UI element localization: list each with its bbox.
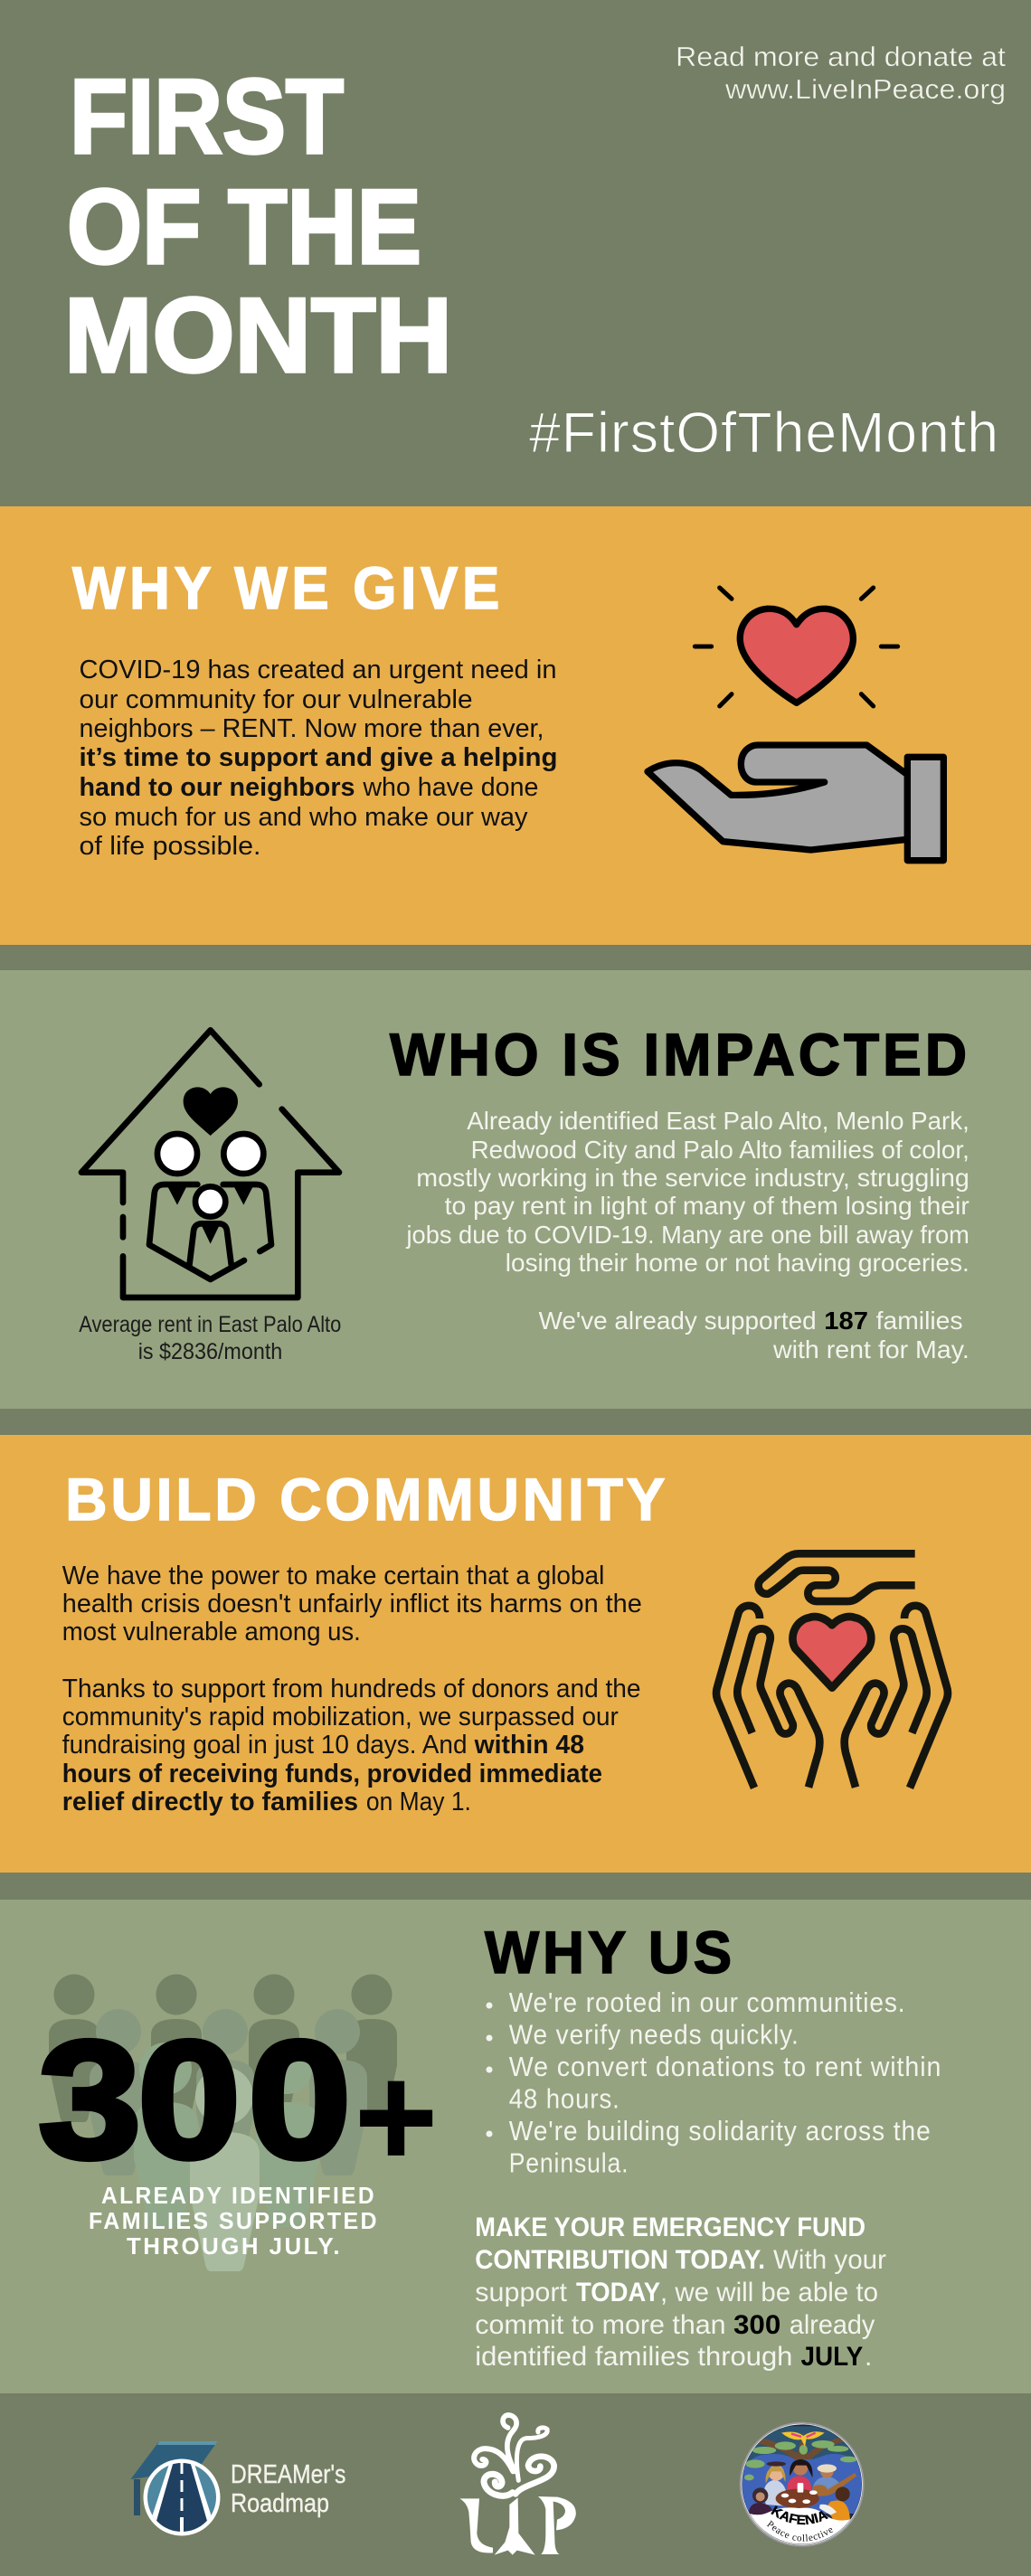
bullet list: We convert donations to rent within: [509, 2051, 941, 2082]
call to action: [475, 2213, 886, 2372]
band: [0, 945, 1031, 970]
logo: Kafenia Peace Collective: [740, 2421, 865, 2547]
bullet list: We're building solidarity across the: [509, 2115, 932, 2147]
icon: hand holding heart: [648, 588, 943, 861]
heading: build community: BUILD COMMUNITY: [65, 1466, 668, 1533]
call to action: CONTRIBUTION TODAY.: [475, 2245, 765, 2275]
text block: why we give: it’s time to support and give a helping: [80, 743, 557, 772]
bullet list: 48 hours.: [509, 2083, 620, 2115]
icon: hands protecting heart: [716, 1553, 948, 1788]
text block: why we give: neighbors – RENT. Now more than ever,: [80, 714, 544, 743]
call to action: MAKE YOUR EMERGENCY FUND: [475, 2213, 865, 2242]
text block: build community: Thanks to support from hundreds of donors and the: [62, 1675, 641, 1703]
people: [748, 2459, 856, 2523]
caption: families supported: ALREADY IDENTIFIED: [101, 2182, 376, 2209]
text block: why we give: of life possible.: [80, 832, 260, 861]
text block: who is impacted: mostly working in the service industry, struggling: [416, 1164, 970, 1192]
heading: why we give: WHY WE GIVE: [72, 554, 504, 621]
text block: who is impacted: families: [876, 1307, 963, 1335]
text block: who is impacted: losing their home or not having groceries.: [506, 1249, 970, 1277]
text block: build community: hours of receiving funds, provided immediate: [62, 1760, 602, 1788]
text block: build community: health crisis doesn't unfairly inflict its harms on the: [62, 1590, 642, 1618]
panel: why us: [0, 1900, 1031, 2393]
logo: DREAMer's Roadmap: Roadmap: [231, 2489, 329, 2518]
caption: average rent: Average rent in East Palo Alto: [79, 1312, 341, 1337]
text block: build community: fundraising goal in just 10 days. And: [62, 1731, 468, 1760]
caption: average rent: [79, 1312, 341, 1364]
text block: build community: We have the power to make certain that a global: [62, 1562, 604, 1590]
call to action: JULY: [801, 2342, 863, 2372]
call to action: TODAY: [576, 2278, 660, 2307]
caption: average rent: is $2836/month: [138, 1339, 282, 1364]
text: donate link: www.LiveInPeace.org: [724, 73, 1006, 105]
call to action: support: [475, 2278, 568, 2307]
heading: why us: WHY US: [485, 1919, 735, 1986]
panel: who is impacted: [0, 970, 1031, 1409]
text: donate link: Read more and donate at: [676, 41, 1006, 72]
text: donate link: [676, 41, 1006, 105]
call to action: , we will be able to: [660, 2278, 878, 2307]
text block: why we give: so much for us and who make our way: [80, 803, 528, 832]
text block: why we give: COVID-19 has created an urgent need in: [80, 656, 557, 684]
panel: why we give: [0, 506, 1031, 945]
call to action: .: [865, 2342, 872, 2372]
text block: who is impacted: with rent for May.: [772, 1335, 970, 1363]
text block: why we give: who have done: [362, 773, 538, 802]
big number: 300+: 300: [38, 2006, 351, 2194]
text block: who is impacted: to pay rent in light of many of them losing their: [445, 1192, 970, 1220]
plus sign: +: [355, 2035, 438, 2197]
logo: Kafenia Peace Collective: Peace collective: [767, 2520, 834, 2542]
text block: who is impacted: 187: [824, 1307, 868, 1335]
caption: families supported: FAMILIES SUPPORTED: [89, 2207, 379, 2234]
title: OF THE: [67, 167, 421, 286]
text block: who is impacted: [406, 1107, 970, 1363]
title: MONTH: [64, 276, 452, 394]
caption: families supported: THROUGH JULY.: [127, 2232, 342, 2260]
icon: crowd of people: [49, 1975, 397, 2271]
text block: build community: within 48: [474, 1731, 584, 1760]
text block: why we give: our community for our vulnerable: [80, 685, 472, 714]
call to action: identified families through: [475, 2342, 792, 2372]
bullet list: We verify needs quickly.: [509, 2019, 799, 2051]
logo: Kafenia Peace Collective: KAFENIA: [771, 2505, 828, 2524]
text block: who is impacted: We've already supported: [539, 1307, 817, 1335]
text block: build community: relief directly to families: [62, 1788, 358, 1816]
panel: build community: [0, 1435, 1031, 1873]
logo: DREAMer's Roadmap: [130, 2441, 345, 2535]
text block: build community: community's rapid mobilization, we surpassed our: [62, 1703, 619, 1731]
logo: Live in Peace: [459, 2415, 576, 2555]
caption: families supported: [89, 2182, 379, 2260]
band: [0, 1873, 1031, 1900]
logo: DREAMer's Roadmap: DREAMer's: [231, 2460, 345, 2489]
hashtag: #FirstOfTheMonth: [529, 401, 999, 465]
heading: who is impacted: WHO IS IMPACTED: [390, 1021, 970, 1088]
title: [64, 57, 452, 394]
text block: build community: [62, 1562, 642, 1816]
text block: build community: on May 1.: [366, 1788, 471, 1816]
text block: who is impacted: Already identified East Palo Alto, Menlo Park,: [467, 1107, 970, 1135]
text block: why we give: hand to our neighbors: [80, 773, 355, 802]
call to action: With your: [773, 2245, 886, 2275]
icon: family in house: [81, 1030, 339, 1297]
bullet list: Peninsula.: [509, 2147, 629, 2179]
bullet list: We're rooted in our communities.: [509, 1986, 906, 2018]
band: [0, 1409, 1031, 1435]
text block: who is impacted: jobs due to COVID-19. Many are one bill away from: [406, 1221, 970, 1249]
text block: who is impacted: Redwood City and Palo Alto families of color,: [471, 1136, 970, 1164]
call to action: commit to more than: [475, 2310, 726, 2340]
panel: footer logos: [130, 2412, 865, 2555]
call to action: already: [790, 2310, 875, 2340]
text block: build community: most vulnerable among us.: [62, 1618, 361, 1647]
call to action: 300: [733, 2310, 780, 2340]
title: FIRST: [70, 57, 344, 175]
text block: why we give: [80, 656, 557, 861]
panel: header: [0, 0, 1031, 506]
bullet list: [487, 1986, 941, 2179]
